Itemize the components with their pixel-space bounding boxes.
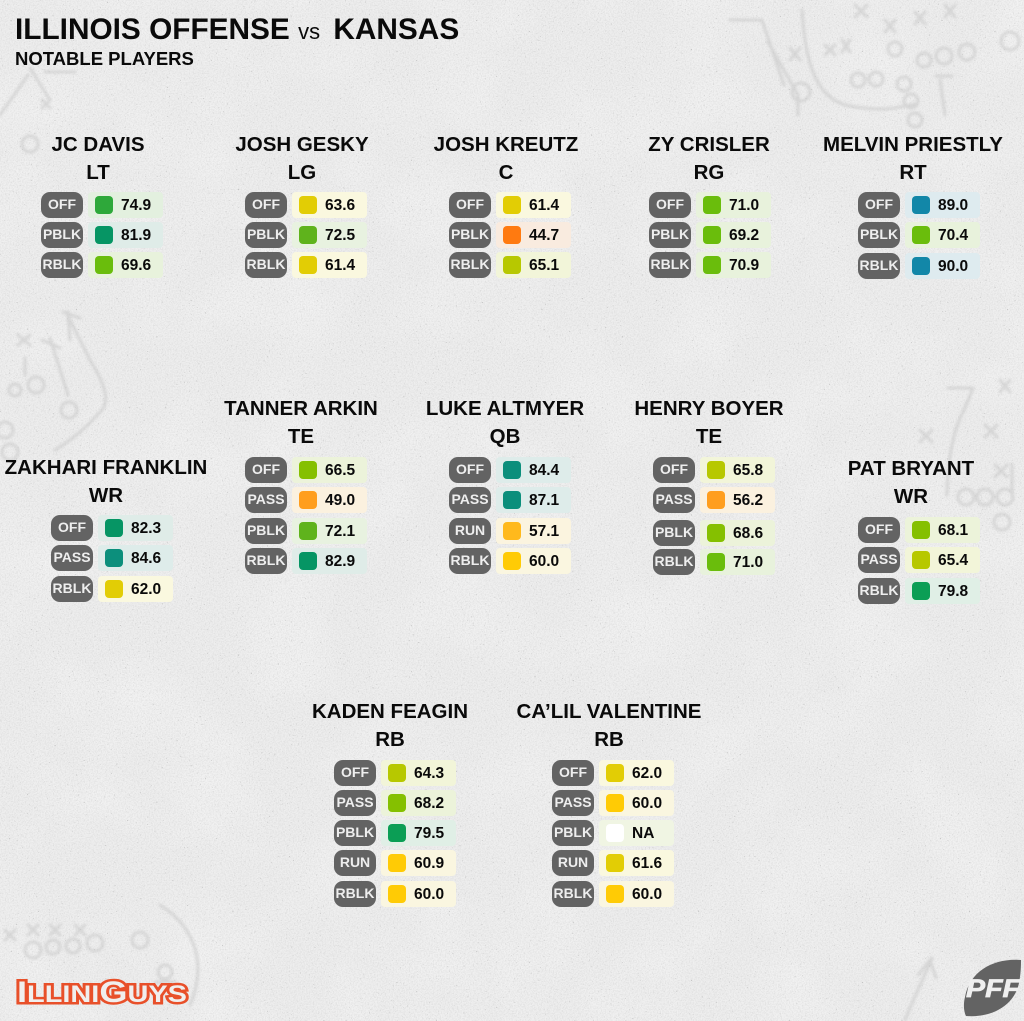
grade: RBLK 70.9: 70.9 [729, 257, 759, 274]
player: Pat Bryant [816, 454, 1006, 634]
grade: PBLK 69.2: 69.2 [729, 227, 759, 244]
grade: PASS 68.2: PASS [336, 794, 374, 810]
grade: RBLK 90.0: RBLK [860, 257, 898, 273]
grade: RUN 60.9 [334, 850, 456, 876]
player: Josh Gesky: LG [288, 161, 316, 184]
player: Ca'Lil Valentine: CA’LIL VALENTINE [517, 700, 701, 723]
grade: PASS 60.0: PASS [554, 794, 592, 810]
grade: PASS 84.6 [51, 545, 173, 571]
grade: PASS 68.2 [334, 790, 456, 816]
grade: OFF 74.9: OFF [48, 196, 76, 212]
grade: PBLK 79.5: PBLK [336, 824, 374, 840]
player: Josh Kreutz [434, 133, 578, 278]
grade: OFF 61.4: 61.4 [529, 197, 559, 214]
grade: PBLK 70.4: 70.4 [938, 227, 968, 244]
grade: PBLK 72.5: 72.5 [325, 227, 355, 244]
logo: PFF: PFF [966, 975, 1021, 1003]
grade: OFF 84.4 [449, 457, 571, 483]
grade: RUN 57.1 [449, 518, 571, 544]
player: Zy Crisler: ZY CRISLER [648, 133, 770, 156]
grade: PBLK 44.7 [449, 222, 571, 248]
player: Tanner Arkin: TE [288, 425, 314, 448]
grade: PBLK 69.2: PBLK [651, 226, 689, 242]
player: Henry Boyer: TE [696, 425, 722, 448]
grade: PBLK 81.9 [41, 222, 163, 248]
player: Henry Boyer: HENRY BOYER [634, 397, 784, 420]
grade: RBLK 90.0 [858, 253, 980, 279]
grade: PASS 49.0: 49.0 [325, 492, 355, 509]
player: Zakhari Franklin [5, 456, 207, 602]
grade: PASS 60.0 [552, 790, 674, 816]
player: Josh Kreutz: C [499, 161, 513, 184]
grade: PBLK 81.9: 81.9 [121, 227, 151, 244]
grade: RBLK 65.1: 65.1 [529, 257, 559, 274]
grade: OFF 63.6: 63.6 [325, 197, 355, 214]
grade: OFF 65.8: 65.8 [733, 462, 763, 479]
grade: RBLK 60.0: 60.0 [529, 553, 559, 570]
player: JC Davis: JC DAVIS [51, 133, 145, 156]
player: Kaden Feagin [295, 697, 485, 907]
grade: PASS 65.4: 65.4 [938, 552, 968, 569]
grade: OFF 71.0 [649, 192, 771, 218]
grade: OFF 71.0: 71.0 [729, 197, 759, 214]
grade: PBLK NA [552, 820, 674, 846]
player: Pat Bryant: PAT BRYANT [848, 457, 974, 480]
grade: RBLK 62.0: RBLK [53, 580, 91, 596]
grade: PBLK 68.6 [653, 520, 775, 546]
grade: OFF 68.1: 68.1 [938, 522, 968, 539]
grade: OFF 62.0: 62.0 [632, 765, 662, 782]
grade: OFF 74.9: 74.9 [121, 197, 151, 214]
grade: RBLK 60.0 [449, 548, 571, 574]
player: JC Davis: LT [86, 161, 110, 184]
grade: PBLK NA: NA [632, 825, 654, 842]
grade: RBLK 60.0: RBLK [451, 552, 489, 568]
player: Zy Crisler [648, 133, 771, 278]
subtitle: NOTABLE PLAYERS [15, 48, 194, 69]
grade: OFF 63.6 [245, 192, 367, 218]
player: Pat Bryant: WR [894, 485, 928, 508]
grade: OFF 89.0 [858, 192, 980, 218]
grade: PBLK 72.1: 72.1 [325, 523, 355, 540]
grade: PASS 65.4: PASS [860, 551, 898, 567]
grade: RBLK 71.0: 71.0 [733, 554, 763, 571]
grade: OFF 61.4: OFF [456, 196, 484, 212]
player: Luke Altmyer [426, 397, 584, 574]
player: Josh Kreutz: JOSH KREUTZ [434, 133, 578, 156]
player: Kaden Feagin: KADEN FEAGIN [312, 700, 468, 723]
player: Josh Gesky [235, 133, 369, 278]
grade: PBLK 68.6: PBLK [655, 524, 693, 540]
grade: RBLK 79.8 [858, 578, 980, 604]
grade: PBLK NA: PBLK [554, 824, 592, 840]
grade: RUN 61.6 [552, 850, 674, 876]
grade: RBLK 69.6: RBLK [43, 256, 81, 272]
player: Luke Altmyer: LUKE ALTMYER [426, 397, 584, 420]
grade: OFF 64.3 [334, 760, 456, 786]
player: Melvin Priestly: RT [899, 161, 927, 184]
grade: OFF 68.1: OFF [865, 521, 893, 537]
player: Tanner Arkin: TANNER ARKIN [224, 397, 378, 420]
grade: RBLK 61.4 [245, 252, 367, 278]
grade: OFF 68.1 [858, 517, 980, 543]
player: Melvin Priestly [823, 133, 1003, 279]
grade: OFF 61.4 [449, 192, 571, 218]
grade: RBLK 90.0: 90.0 [938, 258, 968, 275]
player: Luke Altmyer: QB [490, 425, 520, 448]
grade: RBLK 65.1 [449, 252, 571, 278]
grade: PBLK 72.1: PBLK [247, 522, 285, 538]
logo: PFF [960, 955, 1024, 1021]
grade: RUN 57.1: RUN [455, 522, 485, 538]
grade: PBLK 68.6: 68.6 [733, 525, 763, 542]
grade: OFF 65.8: OFF [660, 461, 688, 477]
grade: RBLK 60.0: 60.0 [632, 886, 662, 903]
grade: OFF 84.4: 84.4 [529, 462, 559, 479]
grade: PBLK 44.7: 44.7 [529, 227, 559, 244]
grade: OFF 64.3: OFF [341, 764, 369, 780]
grade: RBLK 82.9: RBLK [247, 552, 285, 568]
grade: RBLK 60.0 [334, 881, 456, 907]
grade: PASS 56.2 [653, 487, 775, 513]
grade: PASS 87.1 [449, 487, 571, 513]
grade: OFF 82.3: 82.3 [131, 520, 161, 537]
grade: PBLK 44.7: PBLK [451, 226, 489, 242]
grade: OFF 66.5 [245, 457, 367, 483]
grade: RBLK 71.0 [653, 549, 775, 575]
grade: OFF 62.0 [552, 760, 674, 786]
player: JC Davis [41, 133, 163, 278]
player: Tanner Arkin [224, 397, 378, 574]
grade: PASS 87.1: 87.1 [529, 492, 559, 509]
grade: RBLK 65.1: RBLK [451, 256, 489, 272]
grade: RBLK 70.9: RBLK [651, 256, 689, 272]
grade: RBLK 61.4: RBLK [247, 256, 285, 272]
grade: OFF 84.4: OFF [456, 461, 484, 477]
grade: RBLK 79.8: 79.8 [938, 583, 968, 600]
player: Ca'Lil Valentine: RB [594, 728, 624, 751]
grade: OFF 82.3 [51, 515, 173, 541]
grade: RUN 61.6: RUN [558, 854, 588, 870]
grade: PASS 56.2: PASS [655, 491, 693, 507]
grade: RBLK 71.0: RBLK [655, 553, 693, 569]
logo: IlliniGuys: ILLINI GUYS [17, 976, 187, 1009]
grade: OFF 65.8 [653, 457, 775, 483]
grade: OFF 66.5: OFF [252, 461, 280, 477]
grade: RBLK 60.0: 60.0 [414, 886, 444, 903]
player: Kaden Feagin: RB [375, 728, 405, 751]
grade: PBLK 70.4 [858, 222, 980, 248]
grade: PBLK 79.5 [334, 820, 456, 846]
grade: RBLK 61.4: 61.4 [325, 257, 355, 274]
title: ILLINOIS OFFENSE vs KANSAS [15, 13, 459, 46]
grade: PASS 87.1: PASS [451, 491, 489, 507]
grade: RBLK 62.0: 62.0 [131, 581, 161, 598]
grade: RUN 60.9: 60.9 [414, 855, 444, 872]
grade: OFF 66.5: 66.5 [325, 462, 355, 479]
grade: RBLK 69.6 [41, 252, 163, 278]
grade: RUN 60.9: RUN [340, 854, 370, 870]
grade: RBLK 60.0: RBLK [554, 885, 592, 901]
grade: RBLK 60.0: RBLK [336, 885, 374, 901]
grade: PASS 60.0: 60.0 [632, 795, 662, 812]
grade: PASS 65.4 [858, 547, 980, 573]
grade: OFF 62.0: OFF [559, 764, 587, 780]
grade: PBLK 69.2 [649, 222, 771, 248]
grade: PBLK 81.9: PBLK [43, 226, 81, 242]
grade: OFF 89.0: OFF [865, 196, 893, 212]
grade: RBLK 82.9 [245, 548, 367, 574]
grade: PBLK 70.4: PBLK [860, 226, 898, 242]
grade: PASS 68.2: 68.2 [414, 795, 444, 812]
grade: OFF 71.0: OFF [656, 196, 684, 212]
grade: PBLK 72.5 [245, 222, 367, 248]
grade: PASS 84.6: 84.6 [131, 550, 161, 567]
grade: PBLK 72.1 [245, 518, 367, 544]
grade: PASS 49.0 [245, 487, 367, 513]
grade: OFF 74.9 [41, 192, 163, 218]
grade: OFF 64.3: 64.3 [414, 765, 444, 782]
grade: PASS 56.2: 56.2 [733, 492, 763, 509]
grade: RBLK 79.8: RBLK [860, 582, 898, 598]
player: Ca'Lil Valentine [514, 697, 704, 907]
player: Henry Boyer [634, 397, 784, 575]
grade: OFF 63.6: OFF [252, 196, 280, 212]
grade: RBLK 60.0 [552, 881, 674, 907]
grade: RBLK 82.9: 82.9 [325, 553, 355, 570]
player: Zakhari Franklin: ZAKHARI FRANKLIN [5, 456, 207, 479]
grade: PBLK 72.5: PBLK [247, 226, 285, 242]
grade: RUN 57.1: 57.1 [529, 523, 559, 540]
grade: RUN 61.6: 61.6 [632, 855, 662, 872]
grade: PASS 49.0: PASS [247, 491, 285, 507]
player: Melvin Priestly: MELVIN PRIESTLY [823, 133, 1003, 156]
grade: RBLK 70.9 [649, 252, 771, 278]
grade: RBLK 62.0 [51, 576, 173, 602]
player: Zy Crisler: RG [694, 161, 724, 184]
grade: RBLK 69.6: 69.6 [121, 257, 151, 274]
player: Josh Gesky: JOSH GESKY [235, 133, 369, 156]
player: Zakhari Franklin: WR [89, 484, 123, 507]
grade: PASS 84.6: PASS [53, 549, 91, 565]
grade: OFF 82.3: OFF [58, 519, 86, 535]
grade: PBLK 79.5: 79.5 [414, 825, 444, 842]
grade: OFF 89.0: 89.0 [938, 197, 968, 214]
